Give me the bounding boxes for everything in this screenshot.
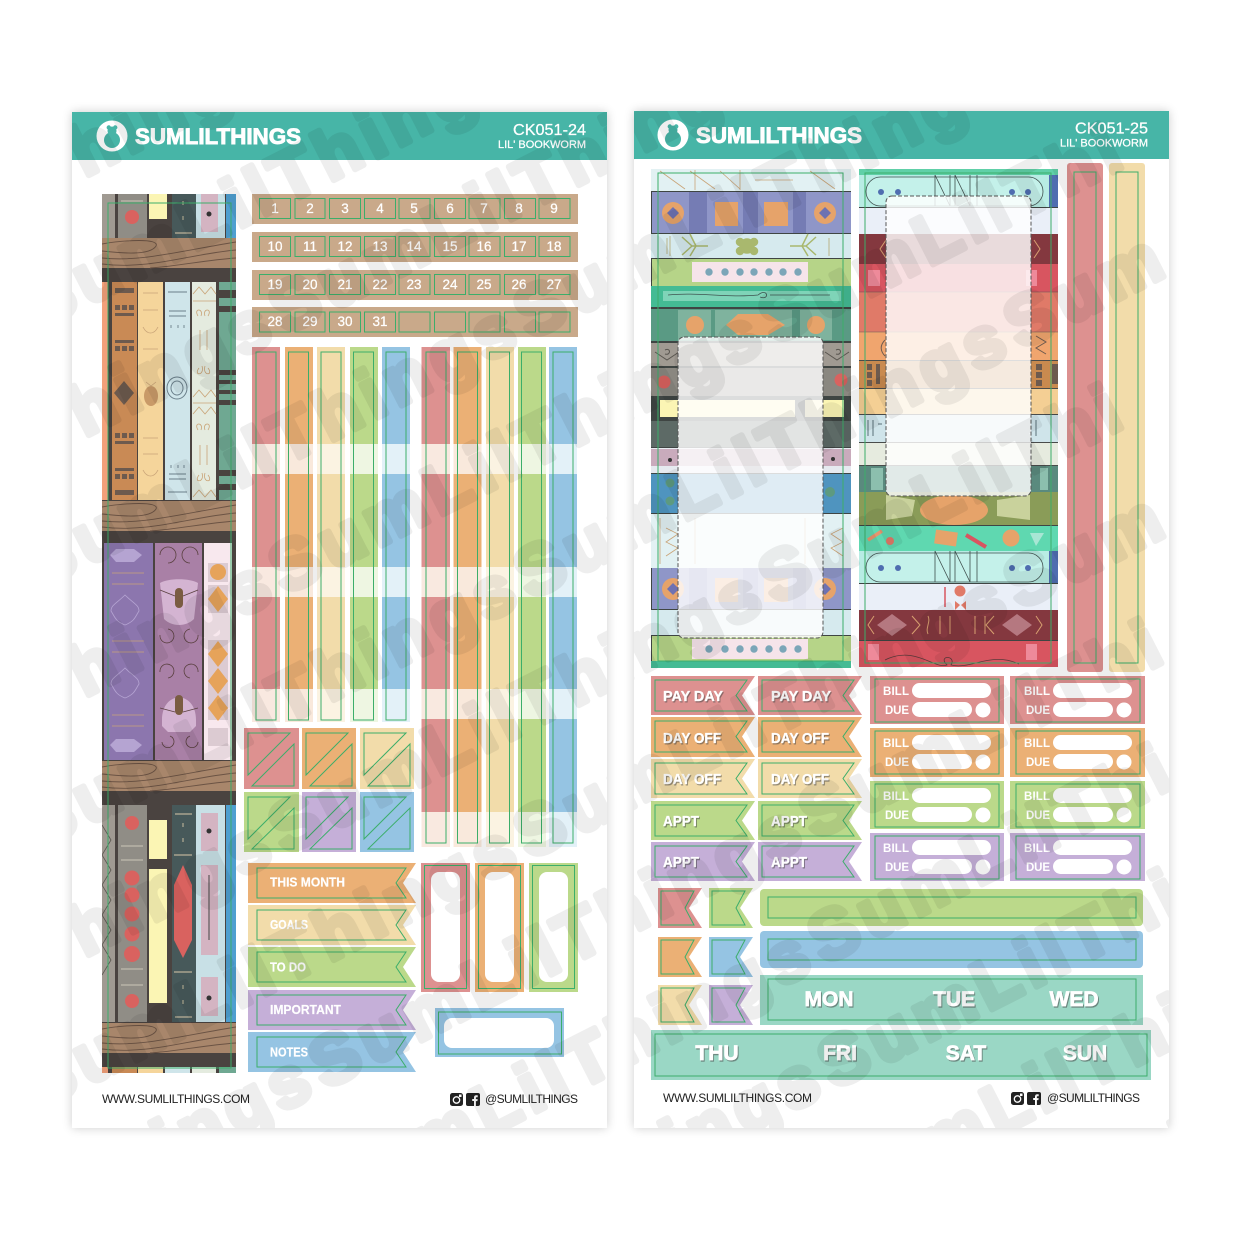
long bars — [760, 889, 1143, 968]
bill and due boxes: DUE — [885, 705, 909, 717]
date strips 1-31: 20 — [302, 277, 318, 292]
watermark: SumLil — [296, 909, 577, 1103]
watermark: SumLil — [11, 929, 292, 1123]
footer sheet 24: WWW.SUMLILTHINGS.COM — [102, 1092, 250, 1106]
stacked books strip A — [651, 169, 851, 668]
rounded frames — [421, 863, 578, 992]
icon: instagram — [450, 1093, 463, 1106]
watermark: Sum — [991, 215, 1181, 363]
header: sheet 24: CK051-24 — [513, 122, 586, 139]
date strips 1-31: 21 — [337, 277, 353, 292]
weekday bar THU FRI SAT SUN: FRI — [823, 1042, 857, 1065]
watermark: SumLil — [815, 1034, 1096, 1228]
weekday bar THU FRI SAT SUN: SAT — [946, 1042, 986, 1065]
watermark: Things — [501, 551, 779, 743]
bill and due boxes: BILL — [883, 843, 909, 855]
date strips 1-31: 26 — [511, 277, 527, 292]
icon: facebook — [466, 1093, 480, 1106]
event flags: DAY OFF — [663, 772, 721, 788]
watermark: SumLil — [746, 164, 1027, 358]
banner flags: THIS MONTH — [270, 876, 345, 890]
header: sheet 25: LIL' BOOKWORM — [1060, 138, 1148, 150]
watermark: Thi — [1050, 852, 1198, 978]
bill and due boxes: DUE — [885, 757, 909, 769]
header: sheet 25 — [634, 111, 1169, 159]
date strips 1-31: 17 — [511, 239, 527, 254]
event flags — [651, 676, 862, 881]
watermark: Things — [550, 911, 828, 1103]
watermark: SumLil — [305, 1034, 586, 1228]
bill and due boxes: BILL — [883, 686, 909, 698]
banner flags: IMPORTANT — [270, 1003, 341, 1017]
panel: sheet CK051-24 — [72, 21, 607, 1128]
bill and due boxes: BILL — [883, 791, 909, 803]
bill and due boxes: BILL — [1024, 843, 1050, 855]
event flags: APPT — [663, 814, 699, 830]
watermark: Things — [501, 31, 779, 223]
tall columns — [1067, 163, 1145, 672]
white overlay box — [678, 337, 823, 638]
watermark: SumLil — [501, 159, 782, 353]
date strips 1-31: 31 — [372, 314, 388, 329]
watermark: Things — [256, 26, 534, 218]
footer sheet 25: WWW.SUMLILTHINGS.COM — [663, 1091, 812, 1105]
icon: facebook — [1027, 1092, 1041, 1105]
bill and due boxes: DUE — [1026, 862, 1050, 874]
split squares — [244, 728, 414, 852]
bill and due boxes: DUE — [1026, 757, 1050, 769]
watermark: Things — [11, 541, 289, 733]
date strips 1-31: 25 — [476, 277, 492, 292]
watermark: SumLil — [11, 149, 292, 343]
banner flags: TO DO — [270, 960, 306, 974]
watermark: Things — [256, 806, 534, 998]
stacked books strip B — [859, 169, 1058, 667]
date strips 1-31: 16 — [476, 239, 492, 254]
date strips 1-31: 15 — [442, 239, 458, 254]
watermark: Things — [746, 556, 1024, 748]
bill and due boxes: BILL — [1024, 738, 1050, 750]
date strips 1-31: 14 — [406, 239, 422, 254]
date strips 1-31: 18 — [546, 239, 562, 254]
bill and due boxes: DUE — [1026, 705, 1050, 717]
watermark: Things — [560, 1036, 838, 1228]
footer sheet 24: @SUMLILTHINGS — [485, 1092, 578, 1106]
vertical stripes group 2 — [422, 347, 577, 847]
date strips 1-31: 29 — [302, 314, 318, 329]
date strips 1-31: 30 — [337, 314, 353, 329]
next shelf sliver — [102, 1067, 236, 1073]
bill and due boxes: BILL — [1024, 686, 1050, 698]
date strips 1-31: 19 — [267, 277, 283, 292]
event flags: APPT — [771, 855, 807, 871]
weekday bar THU FRI SAT SUN: SUN — [1063, 1042, 1107, 1065]
weekday bar THU FRI SAT SUN: THU — [695, 1042, 739, 1065]
watermark: SumLil — [256, 674, 537, 868]
watermark: Thi — [1040, 727, 1188, 853]
date strips 1-31: 28 — [267, 314, 283, 329]
event flags: DAY OFF — [771, 772, 829, 788]
flower motif — [682, 234, 816, 256]
watermark: SumLil — [746, 424, 1027, 618]
date strips 1-31: 5 — [410, 201, 418, 216]
watermark: Things — [501, 291, 779, 483]
footer sheet 24 — [102, 1092, 578, 1106]
weekday bar MON TUE WED: WED — [1050, 988, 1098, 1011]
banner flags: GOALS — [270, 918, 308, 932]
bill and due boxes: DUE — [885, 862, 909, 874]
weekday bar THU FRI SAT SUN — [651, 1030, 1151, 1080]
watermark: Things — [51, 1036, 329, 1228]
date strips 1-31: 8 — [515, 201, 523, 216]
header: sheet 24 — [72, 112, 607, 160]
date strips 1-31 — [252, 194, 578, 337]
date strips 1-31: 3 — [341, 201, 349, 216]
watermark: SumLil — [805, 909, 1086, 1103]
bill and due boxes: BILL — [1024, 791, 1050, 803]
watermark: Things — [541, 786, 819, 978]
date strips 1-31: 9 — [550, 201, 558, 216]
event flags: PAY DAY — [663, 689, 723, 705]
blue label — [435, 1008, 564, 1057]
watermark: Things — [746, 36, 1024, 228]
watermark: Things — [11, 281, 289, 473]
date strips 1-31: 11 — [303, 239, 317, 254]
weekday bar MON TUE WED: MON — [804, 988, 854, 1011]
watermark: Sum — [991, 475, 1181, 623]
icon: logo — [658, 120, 688, 150]
watermark: SumLil — [786, 659, 1067, 853]
date strips 1-31: 4 — [376, 201, 384, 216]
date strips 1-31: 27 — [546, 277, 562, 292]
header: sheet 25: SUMLILTHINGS — [696, 123, 862, 148]
date strips 1-31: 6 — [446, 201, 454, 216]
icon: logo — [96, 120, 128, 152]
date strips 1-31: 10 — [267, 239, 283, 254]
event flags: PAY DAY — [771, 689, 831, 705]
small flags — [658, 888, 753, 1025]
bill and due boxes: DUE — [885, 810, 909, 822]
watermark: Things — [11, 21, 289, 213]
watermark: Things — [256, 546, 534, 738]
weekday bar MON TUE WED — [760, 975, 1143, 1025]
bill and due boxes — [870, 676, 1145, 881]
watermark: Things — [11, 801, 289, 993]
date strips 1-31: 23 — [406, 277, 422, 292]
date strips 1-31: 2 — [306, 201, 314, 216]
banner flags: NOTES — [270, 1046, 308, 1060]
watermark: SumLil — [11, 669, 292, 863]
watermark: SumLil — [256, 414, 537, 608]
sheet shadows — [72, 111, 1169, 1128]
date strips 1-31: 24 — [442, 277, 458, 292]
header: sheet 24: SUMLILTHINGS — [135, 124, 301, 149]
watermark: Thi — [1031, 602, 1179, 728]
watermark: SumLil — [501, 419, 782, 613]
event flags: APPT — [771, 814, 807, 830]
date strips 1-31: 7 — [480, 201, 488, 216]
event flags: APPT — [663, 855, 699, 871]
date strips 1-31: 13 — [372, 239, 388, 254]
watermark: Thi — [991, 367, 1139, 493]
bill and due boxes: BILL — [883, 738, 909, 750]
header: sheet 25: CK051-25 — [1075, 120, 1148, 138]
watermark: Thi — [1060, 977, 1208, 1103]
date strips 1-31: 22 — [372, 277, 388, 292]
event flags: DAY OFF — [771, 731, 829, 747]
watermark: Thi — [1070, 1102, 1218, 1228]
watermark: SumLil — [501, 679, 782, 873]
icon: instagram — [1011, 1092, 1024, 1105]
footer sheet 25 — [663, 1091, 1140, 1105]
header: sheet 24: LIL' BOOKWORM — [498, 139, 586, 151]
date strips 1-31: 12 — [337, 239, 353, 254]
watermark: SumLil — [11, 409, 292, 603]
banner flags — [248, 863, 416, 1072]
book spine strip — [102, 194, 236, 1073]
watermark: Things — [256, 286, 534, 478]
weekday bar MON TUE WED: TUE — [933, 988, 975, 1011]
footer sheet 25: @SUMLILTHINGS — [1047, 1091, 1140, 1105]
watermark: SumLil — [256, 154, 537, 348]
white overlay box — [886, 196, 1031, 496]
bill and due boxes: DUE — [1026, 810, 1050, 822]
watermark: SumLil — [795, 784, 1076, 978]
date strips 1-31: 1 — [271, 201, 279, 216]
middle shelf: purple books — [102, 543, 232, 760]
watermark: Things — [746, 296, 1024, 488]
vertical stripes group 1 — [252, 347, 410, 722]
event flags: DAY OFF — [663, 731, 721, 747]
watermark — [72, 111, 1169, 1128]
watermark: Thi — [991, 107, 1139, 233]
panel: sheet CK051-25 — [634, 111, 1169, 1128]
